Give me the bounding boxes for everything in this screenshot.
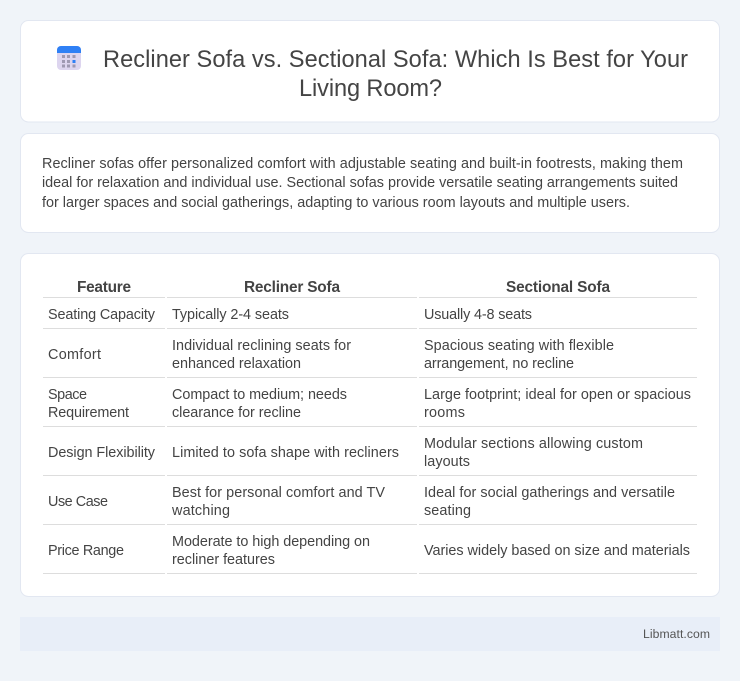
row: space requirement: Compact to medium; needs <box>172 387 347 403</box>
row: design flexibility: Modular sections allowing custom <box>424 436 643 452</box>
row: comfort: arrangement, no recline <box>424 356 574 372</box>
row: use case: Best for personal comfort and TV <box>172 485 385 501</box>
row: comfort: Individual reclining seats for <box>172 338 351 354</box>
row: price range: Price Range <box>48 543 124 559</box>
panel: title card <box>20 20 720 122</box>
footer <box>20 617 720 651</box>
row: design flexibility: Limited to sofa shape with recliners <box>172 445 399 461</box>
row: seating capacity: Usually 4-8 seats <box>424 307 532 323</box>
row: comfort: Spacious seating with flexible <box>424 338 614 354</box>
row: space requirement: rooms <box>424 405 465 421</box>
row: space requirement <box>43 387 697 427</box>
intro text: Recliner sofas offer personalized comfort with adjustable seating and built-in footrests, making them <box>42 156 683 172</box>
row: space requirement: Space <box>48 387 87 403</box>
table header: Sectional Sofa <box>506 279 610 296</box>
row: use case <box>43 485 697 525</box>
title: Living Room? <box>299 76 442 102</box>
row: comfort: Comfort <box>48 347 101 363</box>
table header <box>43 279 697 298</box>
row: space requirement: Large footprint; ideal for open or spacious <box>424 387 691 403</box>
table header: Recliner Sofa <box>244 279 340 296</box>
icon: calendar <box>57 46 81 70</box>
row: use case: watching <box>171 503 230 519</box>
row: seating capacity: Typically 2-4 seats <box>172 307 289 323</box>
title <box>103 47 688 102</box>
intro text <box>42 156 683 211</box>
row: comfort: enhanced relaxation <box>172 356 301 372</box>
row: use case: seating <box>424 503 471 519</box>
row: price range: Moderate to high depending on <box>172 534 370 550</box>
footer: Libmatt.com <box>643 627 710 641</box>
row: seating capacity: Seating Capacity <box>48 307 156 323</box>
panel: comparison table <box>20 254 720 596</box>
row: use case: Use Case <box>48 494 108 510</box>
intro text: ideal for relaxation and individual use. Sectional sofas provide versatile seating arrangements suited <box>42 175 678 191</box>
title: Recliner Sofa vs. Sectional Sofa: Which Is Best for Your <box>103 47 688 73</box>
table header: Feature <box>77 279 131 296</box>
row: price range: recliner features <box>172 552 275 568</box>
row: comfort <box>43 338 697 378</box>
row: space requirement: clearance for recline <box>172 405 301 421</box>
row: design flexibility: layouts <box>424 454 470 470</box>
row: design flexibility <box>43 436 697 476</box>
row: use case: Ideal for social gatherings and versatile <box>424 485 675 501</box>
intro text: for larger spaces and social gatherings, adapting to various room layouts and multiple users. <box>42 195 630 211</box>
row: space requirement: Requirement <box>48 405 129 421</box>
row: price range: Varies widely based on size and materials <box>424 543 690 559</box>
row: price range <box>43 534 697 574</box>
row: design flexibility: Design Flexibility <box>48 445 156 461</box>
panel: introduction <box>20 134 720 232</box>
row: seating capacity <box>43 307 697 329</box>
